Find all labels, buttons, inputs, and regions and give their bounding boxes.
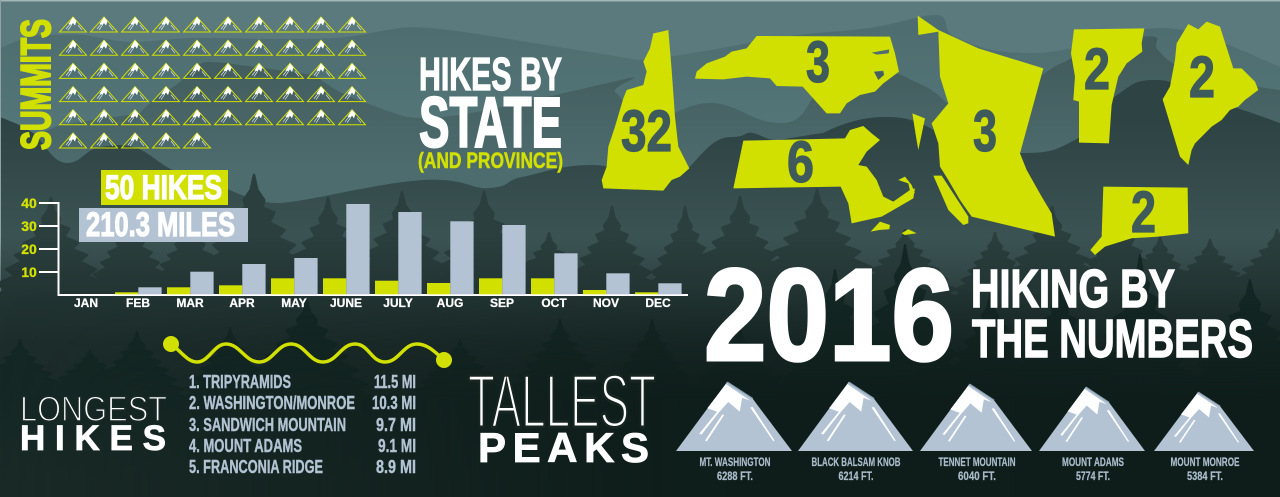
list: longest hikes: 9.7 MI xyxy=(376,415,416,435)
peak: Mount Monroe xyxy=(1154,392,1254,483)
month labels: JULY xyxy=(383,296,413,310)
peak: Black Balsam Knob: 6214 FT. xyxy=(838,469,874,483)
month labels: NOV xyxy=(593,296,619,310)
y axis labels: 20 xyxy=(21,241,37,257)
month labels xyxy=(74,296,671,310)
peak: Mount Adams: MOUNT ADAMS xyxy=(1062,455,1124,469)
month labels: DEC xyxy=(645,296,671,310)
heading: tallest peaks xyxy=(468,359,656,471)
peak: Tennet Mountain xyxy=(920,384,1032,483)
peak: Black Balsam Knob: BLACK BALSAM KNOB xyxy=(812,455,901,469)
list: longest hikes: 8.9 MI xyxy=(376,457,416,477)
peak: Mt. Washington xyxy=(676,382,792,483)
stat: 210.3 miles: 210.3 MILES xyxy=(86,206,235,244)
peak: Black Balsam Knob xyxy=(798,382,913,483)
y axis labels: 10 xyxy=(21,264,37,280)
state: Maine: 2 xyxy=(1189,45,1215,110)
month labels: SEP xyxy=(490,296,514,310)
list: longest hikes: 2. WASHINGTON/MONROE xyxy=(189,393,355,413)
province: British Columbia: 3 xyxy=(973,99,997,164)
stat: 50 hikes: 50 HIKES xyxy=(105,169,222,207)
state: North Carolina: 3 xyxy=(806,30,830,95)
heading: longest hikes: HIKES xyxy=(20,419,166,458)
peak: Mount Monroe: 5384 FT. xyxy=(1187,469,1223,483)
title: 2016 hiking by the numbers: HIKING BY xyxy=(971,259,1175,319)
heading: hikes by state: STATE xyxy=(419,84,562,163)
list: longest hikes: 9.1 MI xyxy=(378,436,416,456)
state: Connecticut xyxy=(1090,180,1188,255)
heading: longest hikes xyxy=(20,390,167,458)
month labels: MAY xyxy=(281,296,307,310)
y axis labels xyxy=(21,195,37,280)
month labels: JAN xyxy=(74,296,98,310)
icon: winding trail squiggle xyxy=(163,336,452,368)
list: longest hikes: 4. MOUNT ADAMS xyxy=(189,436,302,456)
list: longest hikes: 10.3 MI xyxy=(372,393,416,413)
state: New Hampshire xyxy=(602,30,689,191)
state: Massachusetts: 6 xyxy=(787,130,814,195)
peak: Mount Adams xyxy=(1039,387,1145,483)
state: North Carolina xyxy=(695,30,899,113)
state: Maine xyxy=(1163,22,1258,165)
title: 2016 hiking by the numbers xyxy=(704,241,1253,388)
peak: Mount Adams: 5774 FT. xyxy=(1076,469,1110,483)
list: longest hikes: 1. TRIPYRAMIDS xyxy=(189,372,291,392)
peak: Tennet Mountain: TENNET MOUNTAIN xyxy=(938,455,1016,469)
peak: Mt. Washington: 6288 FT. xyxy=(717,469,753,483)
heading: hikes by state: HIKES BY xyxy=(419,48,562,100)
state maps with hike counts xyxy=(602,16,1258,255)
state: New Hampshire: 32 xyxy=(621,99,672,164)
province: British Columbia xyxy=(912,16,1055,237)
list: longest hikes xyxy=(189,372,416,477)
state: Connecticut: 2 xyxy=(1131,180,1156,245)
peak: Mount Monroe: MOUNT MONROE xyxy=(1170,455,1240,469)
mile bars xyxy=(138,204,682,294)
heading: longest hikes: LONGEST xyxy=(20,390,167,429)
y axis labels: 40 xyxy=(21,195,37,211)
pictogram: 55 summit mountain icons xyxy=(60,17,366,148)
peak: Tennet Mountain: 6040 FT. xyxy=(958,469,996,483)
title: 2016 hiking by the numbers: 2016 xyxy=(704,241,954,388)
heading: tallest peaks: PEAKS xyxy=(478,424,649,471)
heading: hikes by state: (AND PROVINCE) xyxy=(418,148,563,173)
month labels: JUNE xyxy=(330,296,362,310)
hike bars xyxy=(115,278,658,294)
month labels: FEB xyxy=(126,296,150,310)
state: Vermont: 2 xyxy=(1084,37,1110,102)
month labels: AUG xyxy=(437,296,463,310)
month labels: MAR xyxy=(176,296,204,310)
state: Massachusetts xyxy=(733,126,917,235)
state: Vermont xyxy=(1071,28,1144,143)
month labels: OCT xyxy=(541,296,567,310)
y axis labels: 30 xyxy=(21,218,37,234)
month labels: APR xyxy=(229,296,255,310)
list: longest hikes: 3. SANDWICH MOUNTAIN xyxy=(189,415,346,435)
peak: Mt. Washington: MT. WASHINGTON xyxy=(700,455,770,469)
chart axes xyxy=(39,203,688,295)
list: longest hikes: 11.5 MI xyxy=(374,372,416,392)
heading: tallest peaks: TALLEST xyxy=(468,359,656,443)
bar chart: hikes and miles by month xyxy=(21,195,688,310)
heading: hikes by state xyxy=(418,48,563,173)
list: longest hikes: 5. FRANCONIA RIDGE xyxy=(189,457,323,477)
